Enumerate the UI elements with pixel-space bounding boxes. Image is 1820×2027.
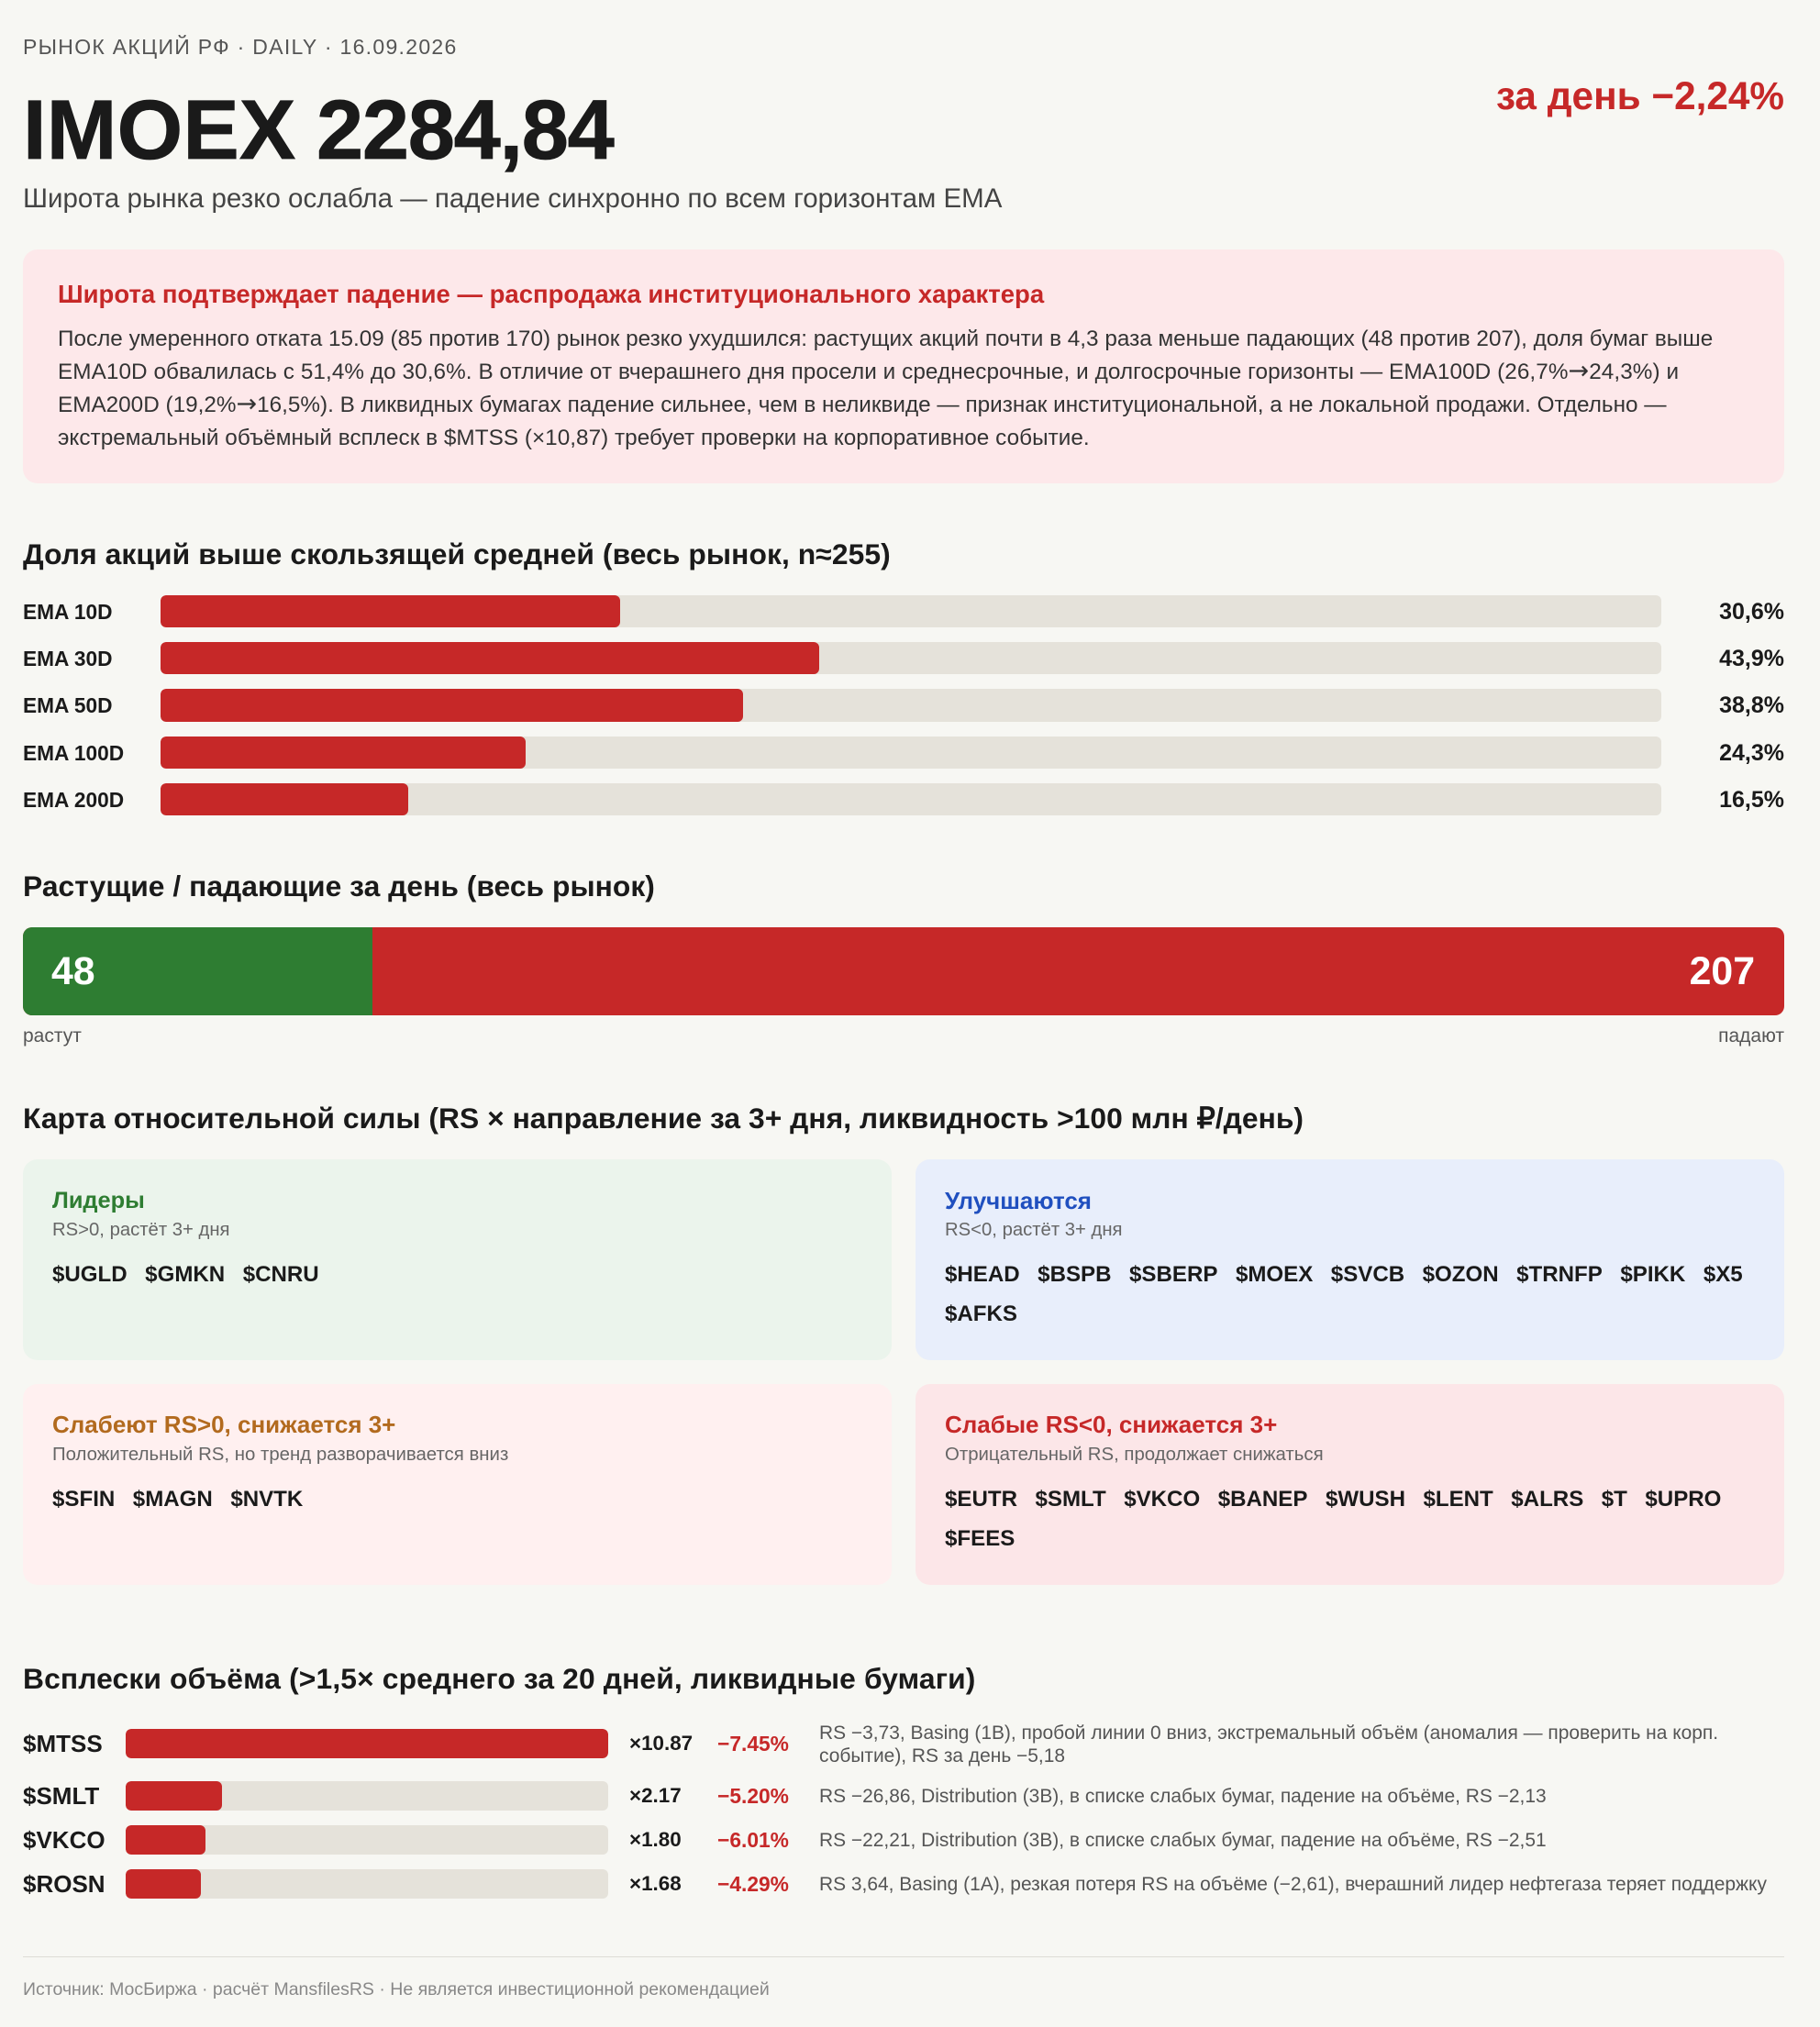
panel subtitle: RS<0, растёт 3+ дня [945,1220,1123,1240]
panel: improving [916,1159,1784,1360]
tickers: $EUTR [945,1487,1017,1512]
tickers: $NVTK [230,1487,303,1512]
tickers: $HEAD [945,1262,1020,1287]
panel title: Лидеры [52,1188,145,1213]
row: EMA 200D: 16,5% [1719,787,1784,813]
row: SMLT: RS −26,86, Distribution (3B), в списке слабых бумаг, падение на объёме, RS −2,13 [819,1786,1547,1807]
row: ROSN: −4.29% [717,1872,789,1896]
row: MTSS: ×10.87 [629,1732,693,1755]
heading: RS map: Карта относительной силы (RS × направление за 3+ дня, ликвидность >100 млн ₽/день) [23,1102,1304,1135]
panel title: Слабые RS<0, снижается 3+ [945,1411,1277,1438]
tickers: $X5 [1703,1262,1743,1287]
alert body: EMA10D обвалилась с 51,4% до 30,6%. В отличие от вчерашнего дня просели и среднесрочные, и долгосрочные горизонты — EMA100D (26,7%→24,3%) и [58,357,1679,385]
tickers: $SMLT [1035,1487,1106,1512]
row: EMA 200D: EMA 200D [23,788,124,812]
alert heading: Широта подтверждает падение — распродажа институционального характера [58,280,1044,308]
tickers: $MOEX [1236,1262,1313,1287]
row: VKCO: −6.01% [717,1828,789,1852]
alert body: EMA200D (19,2%→16,5%). В ликвидных бумагах падение сильнее, чем в неликвиде — признак институциональной, а не локальной продажи. Отдельно — [58,390,1667,418]
panel title: Улучшаются [945,1187,1092,1214]
row: ROSN [23,1869,1767,1899]
row: EMA 100D: 24,3% [1719,740,1784,766]
heading: EMA breadth: Доля акций выше скользящей средней (весь рынок, n≈255) [23,537,891,570]
row: EMA 50D: EMA 50D [23,693,112,717]
tickers: $UGLD [52,1262,128,1287]
row: MTSS: $MTSS [23,1730,103,1757]
tickers: $T [1602,1487,1627,1512]
tickers: $FEES [945,1526,1015,1551]
row: ROSN: $ROSN [23,1870,105,1898]
chart: advancers vs decliners [23,927,1784,1015]
row: SMLT: ×2.17 [629,1784,682,1807]
row: EMA 200D [23,783,1784,815]
row: EMA 30D: EMA 30D [23,647,112,670]
tickers: $CNRU [243,1262,319,1287]
row: EMA 10D: 30,6% [1719,599,1784,625]
tickers: $AFKS [945,1301,1017,1326]
row: EMA 10D: EMA 10D [23,600,112,624]
row: VKCO [23,1825,1547,1855]
row: VKCO: RS −22,21, Distribution (3B), в списке слабых бумаг, падение на объёме, RS −2,51 [819,1830,1547,1851]
tickers: $PIKK [1620,1262,1685,1287]
row: EMA 50D [23,689,1784,722]
row: EMA 30D [23,642,1784,674]
tickers: $SFIN [52,1487,115,1512]
tickers: $SBERP [1129,1262,1217,1287]
row: MTSS: RS −3,73, Basing (1B), пробой линии 0 вниз, экстремальный объём (аномалия — проверить на корп. [819,1722,1718,1744]
row: SMLT: −5.20% [717,1784,789,1808]
heading: volume spikes: Всплески объёма (>1,5× среднего за 20 дней, ликвидные бумаги) [23,1662,976,1695]
alert body: экстремальный объёмный всплеск в $MTSS (×10,87) требует проверки на корпоративное событие. [58,426,1090,450]
label: advancers: растут [23,1025,82,1047]
row: SMLT [23,1781,1547,1811]
tickers: $BANEP [1218,1487,1307,1512]
panel: weak [916,1384,1784,1585]
row: VKCO: $VKCO [23,1826,105,1854]
panel: alert [23,249,1784,483]
tickers: $UPRO [1645,1487,1721,1512]
row: ROSN: RS 3,64, Basing (1A), резкая потеря RS на объёме (−2,61), вчерашний лидер нефтегаза теряет поддержку [819,1874,1767,1895]
tickers: $MAGN [133,1487,213,1512]
row: MTSS: событие), RS за день −5,18 [819,1745,1065,1767]
row: EMA 100D: EMA 100D [23,741,124,765]
footer: Источник: МосБиржа · расчёт MansfilesRS · Не является инвестиционной рекомендацией [23,1979,770,1999]
panel subtitle: RS>0, растёт 3+ дня [52,1220,230,1240]
row: EMA 30D: 43,9% [1719,646,1784,671]
tickers: $SVCB [1331,1262,1404,1287]
tickers: $LENT [1423,1487,1493,1512]
bar chart: EMA breadth [23,595,1784,815]
row: EMA 50D: 38,8% [1719,692,1784,718]
tickers [52,1262,319,1287]
tickers [945,1487,1721,1551]
panel subtitle: Положительный RS, но тренд разворачивается вниз [52,1445,508,1465]
row: EMA 100D [23,737,1784,769]
panel title: Слабеют RS>0, снижается 3+ [52,1411,395,1438]
eyebrow: РЫНОК АКЦИЙ РФ · DAILY · 16.09.2026 [23,35,458,59]
tickers: $TRNFP [1516,1262,1603,1287]
row: EMA 10D [23,595,1784,627]
subtitle: Широта рынка резко ослабла — падение синхронно по всем горизонтам EMA [23,183,1002,214]
label: decliners: падают [1718,1025,1784,1047]
tickers: $BSPB [1038,1262,1112,1287]
row: VKCO: ×1.80 [629,1828,682,1851]
row: SMLT: $SMLT [23,1782,99,1810]
advancers segment [23,927,372,1015]
table: volume spikes [23,1722,1767,1899]
tickers: $ALRS [1511,1487,1583,1512]
tickers: $WUSH [1326,1487,1405,1512]
panel: weakening [23,1384,892,1585]
row: ROSN: ×1.68 [629,1872,682,1895]
tickers: $VKCO [1124,1487,1200,1512]
advancers segment: 48 [51,949,95,993]
title: IMOEX 2284,84 [23,83,614,177]
heading: advancers decliners: Растущие / падающие за день (весь рынок) [23,870,655,903]
tickers: $GMKN [145,1262,225,1287]
row: MTSS [23,1722,1718,1767]
decliners value: 207 [1690,949,1755,993]
tickers [52,1487,303,1512]
panel subtitle: Отрицательный RS, продолжает снижаться [945,1445,1324,1465]
tickers: $OZON [1423,1262,1499,1287]
daily change: за день −2,24% [1496,74,1784,117]
alert body: После умеренного отката 15.09 (85 против 170) рынок резко ухудшился: растущих акций почти в 4,3 раза меньше падающих (48 против 207), доля бумаг выше [58,327,1713,351]
tickers [945,1262,1743,1326]
panel: leaders [23,1159,892,1360]
alert body [58,327,1713,450]
row: MTSS: −7.45% [717,1732,789,1756]
